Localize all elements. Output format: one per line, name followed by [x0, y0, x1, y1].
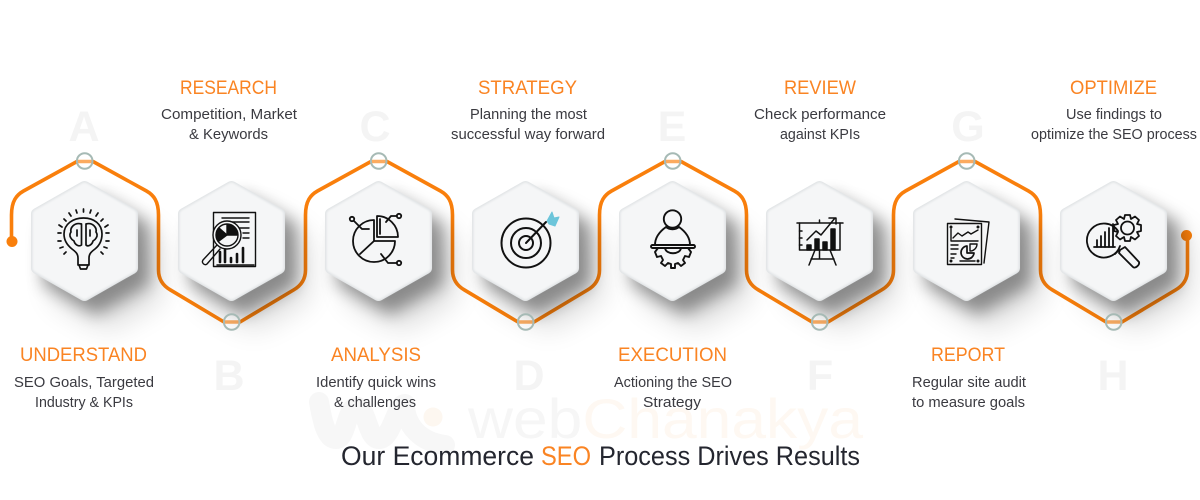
step: execution: Strategy: [643, 395, 702, 411]
step: understand: UNDERSTAND: [20, 344, 147, 366]
title: [341, 441, 860, 471]
step: review: REVIEW: [784, 77, 857, 99]
step: analysis: [316, 344, 436, 411]
step: optimize: Use findings to: [1066, 107, 1162, 123]
step: report: Regular site audit: [912, 375, 1026, 391]
step: understand: SEO Goals, Targeted: [14, 375, 154, 391]
step: optimize: [1031, 77, 1197, 143]
step: execution: [614, 344, 732, 411]
title: Process Drives Results: [599, 441, 860, 471]
ring markers on the line: [77, 153, 1121, 330]
icon: report with magnifier: [202, 212, 256, 266]
step: analysis: & challenges: [334, 395, 416, 411]
background letters A to H: H: [1097, 352, 1129, 400]
title: SEO: [541, 441, 591, 471]
icon: person at gear desk: [651, 210, 695, 268]
icon: pie chart with nodes: [350, 214, 401, 265]
icon: report sheets: [948, 219, 989, 264]
step: understand: [14, 344, 154, 411]
icon: magnifier with gear and bars: [1087, 215, 1141, 268]
step: strategy: successful way forward: [451, 127, 605, 143]
step: research: RESEARCH: [180, 77, 277, 99]
step: research: & Keywords: [189, 127, 268, 143]
hexagon shadows: [48, 200, 1184, 322]
step: report: [912, 344, 1026, 411]
step: report: to measure goals: [912, 395, 1025, 411]
watermark: webChanakya logo: webChanakya: [467, 387, 864, 450]
step: strategy: [451, 77, 605, 143]
background letters A to H: G: [951, 103, 985, 151]
orange process line: [6, 162, 1192, 322]
step: review: [754, 77, 886, 143]
step: strategy: STRATEGY: [478, 77, 577, 99]
step: analysis: Identify quick wins: [316, 375, 436, 391]
step: execution: Actioning the SEO: [614, 375, 732, 391]
step: research: Competition, Market: [161, 107, 297, 123]
step: review: Check performance: [754, 107, 886, 123]
step: report: REPORT: [931, 344, 1005, 366]
background letters A to H: E: [658, 103, 686, 151]
background letters A to H: D: [513, 352, 545, 400]
title: Our Ecommerce: [341, 441, 534, 471]
icon: light bulb with brain: [58, 209, 109, 269]
background letters A to H: A: [68, 103, 100, 151]
step: research: [161, 77, 297, 143]
step: execution: EXECUTION: [618, 344, 727, 366]
step: optimize: OPTIMIZE: [1070, 77, 1157, 99]
background letters A to H: [68, 103, 1129, 400]
background letters A to H: C: [359, 103, 391, 151]
step: analysis: ANALYSIS: [331, 344, 421, 366]
watermark: webChanakya logo: [319, 387, 864, 450]
background letters A to H: F: [807, 352, 833, 400]
step: review: against KPIs: [780, 127, 860, 143]
background letters A to H: B: [213, 352, 245, 400]
icon: target with arrow: [502, 212, 559, 268]
hexagon cards: [37, 187, 1161, 295]
step: strategy: Planning the most: [470, 107, 587, 123]
icon: presentation board with growth chart: [797, 218, 843, 265]
step: optimize: optimize the SEO process: [1031, 127, 1197, 143]
step: understand: Industry & KPIs: [35, 395, 133, 411]
